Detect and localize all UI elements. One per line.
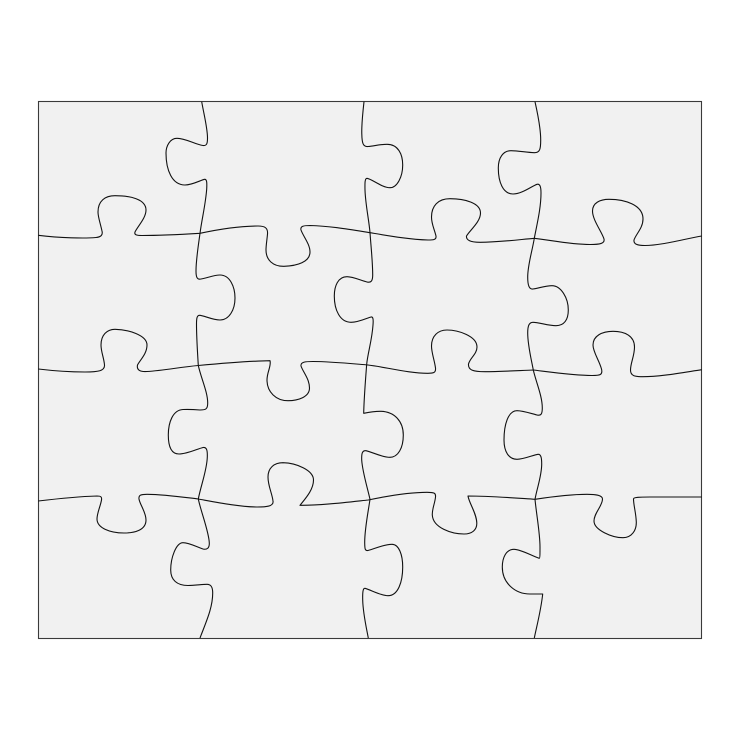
vertical cut line, column 1 [166, 102, 235, 638]
horizontal cut line, row 2 [38, 329, 702, 401]
vertical cut line, column 2 [334, 102, 403, 638]
puzzle board [38, 102, 702, 638]
vertical cut line, column 3 [498, 102, 568, 638]
horizontal cut line, row 3 [38, 463, 702, 538]
puzzle cut lines [38, 102, 702, 638]
horizontal cut line, row 1 [38, 196, 702, 266]
